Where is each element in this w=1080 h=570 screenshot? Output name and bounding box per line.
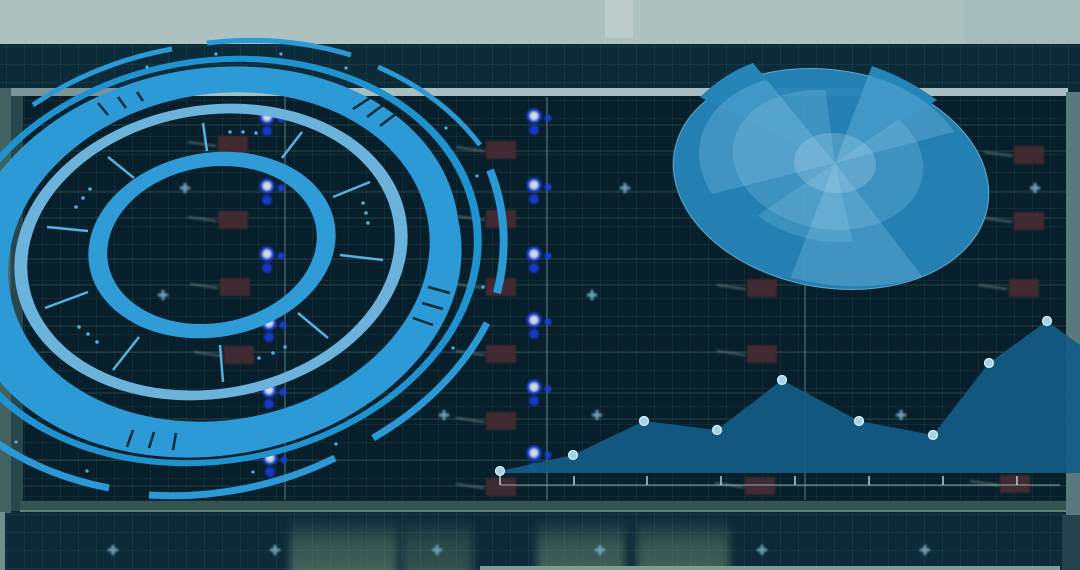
x axis with ticks xyxy=(500,476,1060,485)
mid ellipse with gap wedge xyxy=(732,90,924,230)
outermost sector tips xyxy=(700,63,937,163)
small dot clusters xyxy=(14,52,485,474)
middle pale ring xyxy=(0,79,424,425)
area line chart xyxy=(496,316,1080,485)
lower bright sector xyxy=(758,164,852,242)
server status LEDs xyxy=(260,108,552,477)
polar area chart xyxy=(672,63,990,290)
area fill xyxy=(500,321,1080,473)
thin full ring xyxy=(0,18,510,504)
thick ring tick marks xyxy=(98,92,450,450)
thick ring xyxy=(0,66,462,458)
hub ellipse xyxy=(792,130,878,196)
outer ring arc segments xyxy=(0,40,504,496)
server drive units xyxy=(188,136,1044,496)
radial spokes xyxy=(45,123,383,382)
data point markers xyxy=(496,316,1052,476)
grid plus markers xyxy=(108,183,1040,555)
chart base disc xyxy=(656,44,1006,314)
circular radar gauge xyxy=(0,18,510,504)
inner ring xyxy=(84,141,340,349)
large sectors xyxy=(699,76,954,286)
